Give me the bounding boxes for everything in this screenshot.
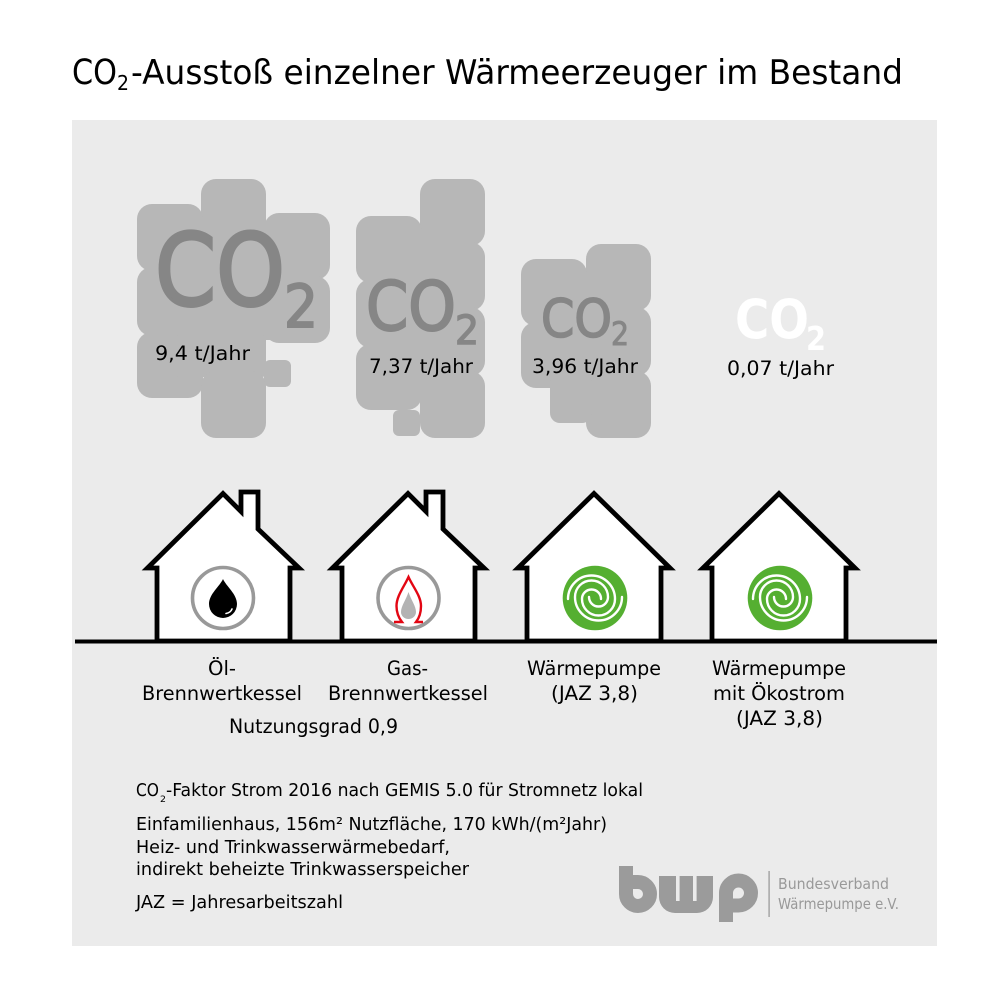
cloud: Wärmepumpe	[521, 244, 651, 438]
label: white CO2 with Ökostrom: 2	[806, 319, 826, 358]
label: Wärmepumpe mit Ökostrom: Wärmepumpe	[712, 657, 846, 680]
logo: bwp	[626, 866, 899, 922]
label: Öl-Brennwertkessel: Öl-	[208, 657, 236, 680]
logo wordmark: Wärmepumpe e.V.	[778, 895, 899, 913]
notes text block: -Faktor Strom 2016 nach GEMIS 5.0 für Stromnetz lokal	[166, 781, 643, 801]
logo wordmark: Bundesverband	[778, 875, 889, 893]
label: Gas-Brennwertkessel: Brennwertkessel	[328, 682, 488, 705]
icon: oil drop	[192, 568, 254, 628]
label: CO2: CO	[155, 212, 285, 329]
cloud: Gas-Brennwertkessel	[356, 179, 485, 438]
logo letter p	[726, 880, 751, 922]
house 4: Wärmepumpe Ökostrom	[703, 494, 855, 641]
panel: background	[72, 120, 937, 946]
label: Wärmepumpe: (JAZ 3,8)	[551, 682, 638, 705]
notes text block: 2	[160, 795, 166, 805]
label: CO2: 2	[284, 272, 318, 341]
label: CO2: CO	[366, 268, 456, 347]
logo letter b	[626, 866, 650, 906]
title: 2	[117, 71, 129, 95]
notes text block: Heiz- und Trinkwasserwärmebedarf,	[136, 838, 450, 858]
notes text block	[135, 781, 643, 913]
title: -Ausstoß einzelner Wärmeerzeuger im Bestand	[131, 53, 903, 93]
value: 7,37 t/Jahr: 7,37 t/Jahr	[369, 355, 474, 378]
icon: gas flame	[378, 568, 439, 628]
house 3: Wärmepumpe	[518, 494, 670, 641]
label: CO2: 2	[455, 308, 479, 354]
label: CO2: 2	[611, 315, 629, 353]
value: 0,07 t/Jahr: 0,07 t/Jahr	[727, 357, 835, 380]
notes text block: Einfamilienhaus, 156m² Nutzfläche, 170 kWh/(m²Jahr)	[136, 815, 607, 835]
label: Nutzungsgrad: Nutzungsgrad 0,9	[229, 715, 398, 738]
house 2: Gas	[332, 492, 484, 641]
label: Wärmepumpe mit Ökostrom: mit Ökostrom	[713, 682, 845, 705]
notes text block: CO	[136, 781, 159, 801]
notes text block: JAZ = Jahresarbeitszahl	[135, 893, 343, 913]
title: CO	[72, 53, 117, 93]
logo divider	[768, 871, 770, 917]
cloud: Öl-Brennwertkessel	[137, 179, 330, 438]
label: Wärmepumpe: Wärmepumpe	[527, 657, 661, 680]
label: Gas-Brennwertkessel: Gas-	[387, 657, 428, 680]
label: Öl-Brennwertkessel	[142, 657, 302, 705]
ground line	[75, 640, 937, 644]
label: Gas-Brennwertkessel	[328, 657, 488, 705]
icon: heat pump spiral	[563, 566, 627, 630]
label: CO2: CO	[541, 289, 612, 350]
house 1: Öl	[148, 492, 299, 641]
value: 3,96 t/Jahr: 3,96 t/Jahr	[532, 355, 639, 378]
value: 9,4 t/Jahr: 9,4 t/Jahr	[155, 342, 251, 365]
label: Wärmepumpe mit Ökostrom	[712, 657, 846, 730]
logo letter w	[659, 876, 713, 913]
label: Öl-Brennwertkessel: Brennwertkessel	[142, 682, 302, 705]
icon: heat pump spiral	[748, 566, 812, 630]
notes text block: indirekt beheizte Trinkwasserspeicher	[136, 860, 470, 880]
logo wordmark	[778, 875, 899, 913]
label: Wärmepumpe	[527, 657, 661, 705]
label: white CO2 with Ökostrom: CO	[735, 288, 809, 351]
label: Wärmepumpe mit Ökostrom: (JAZ 3,8)	[736, 707, 823, 730]
